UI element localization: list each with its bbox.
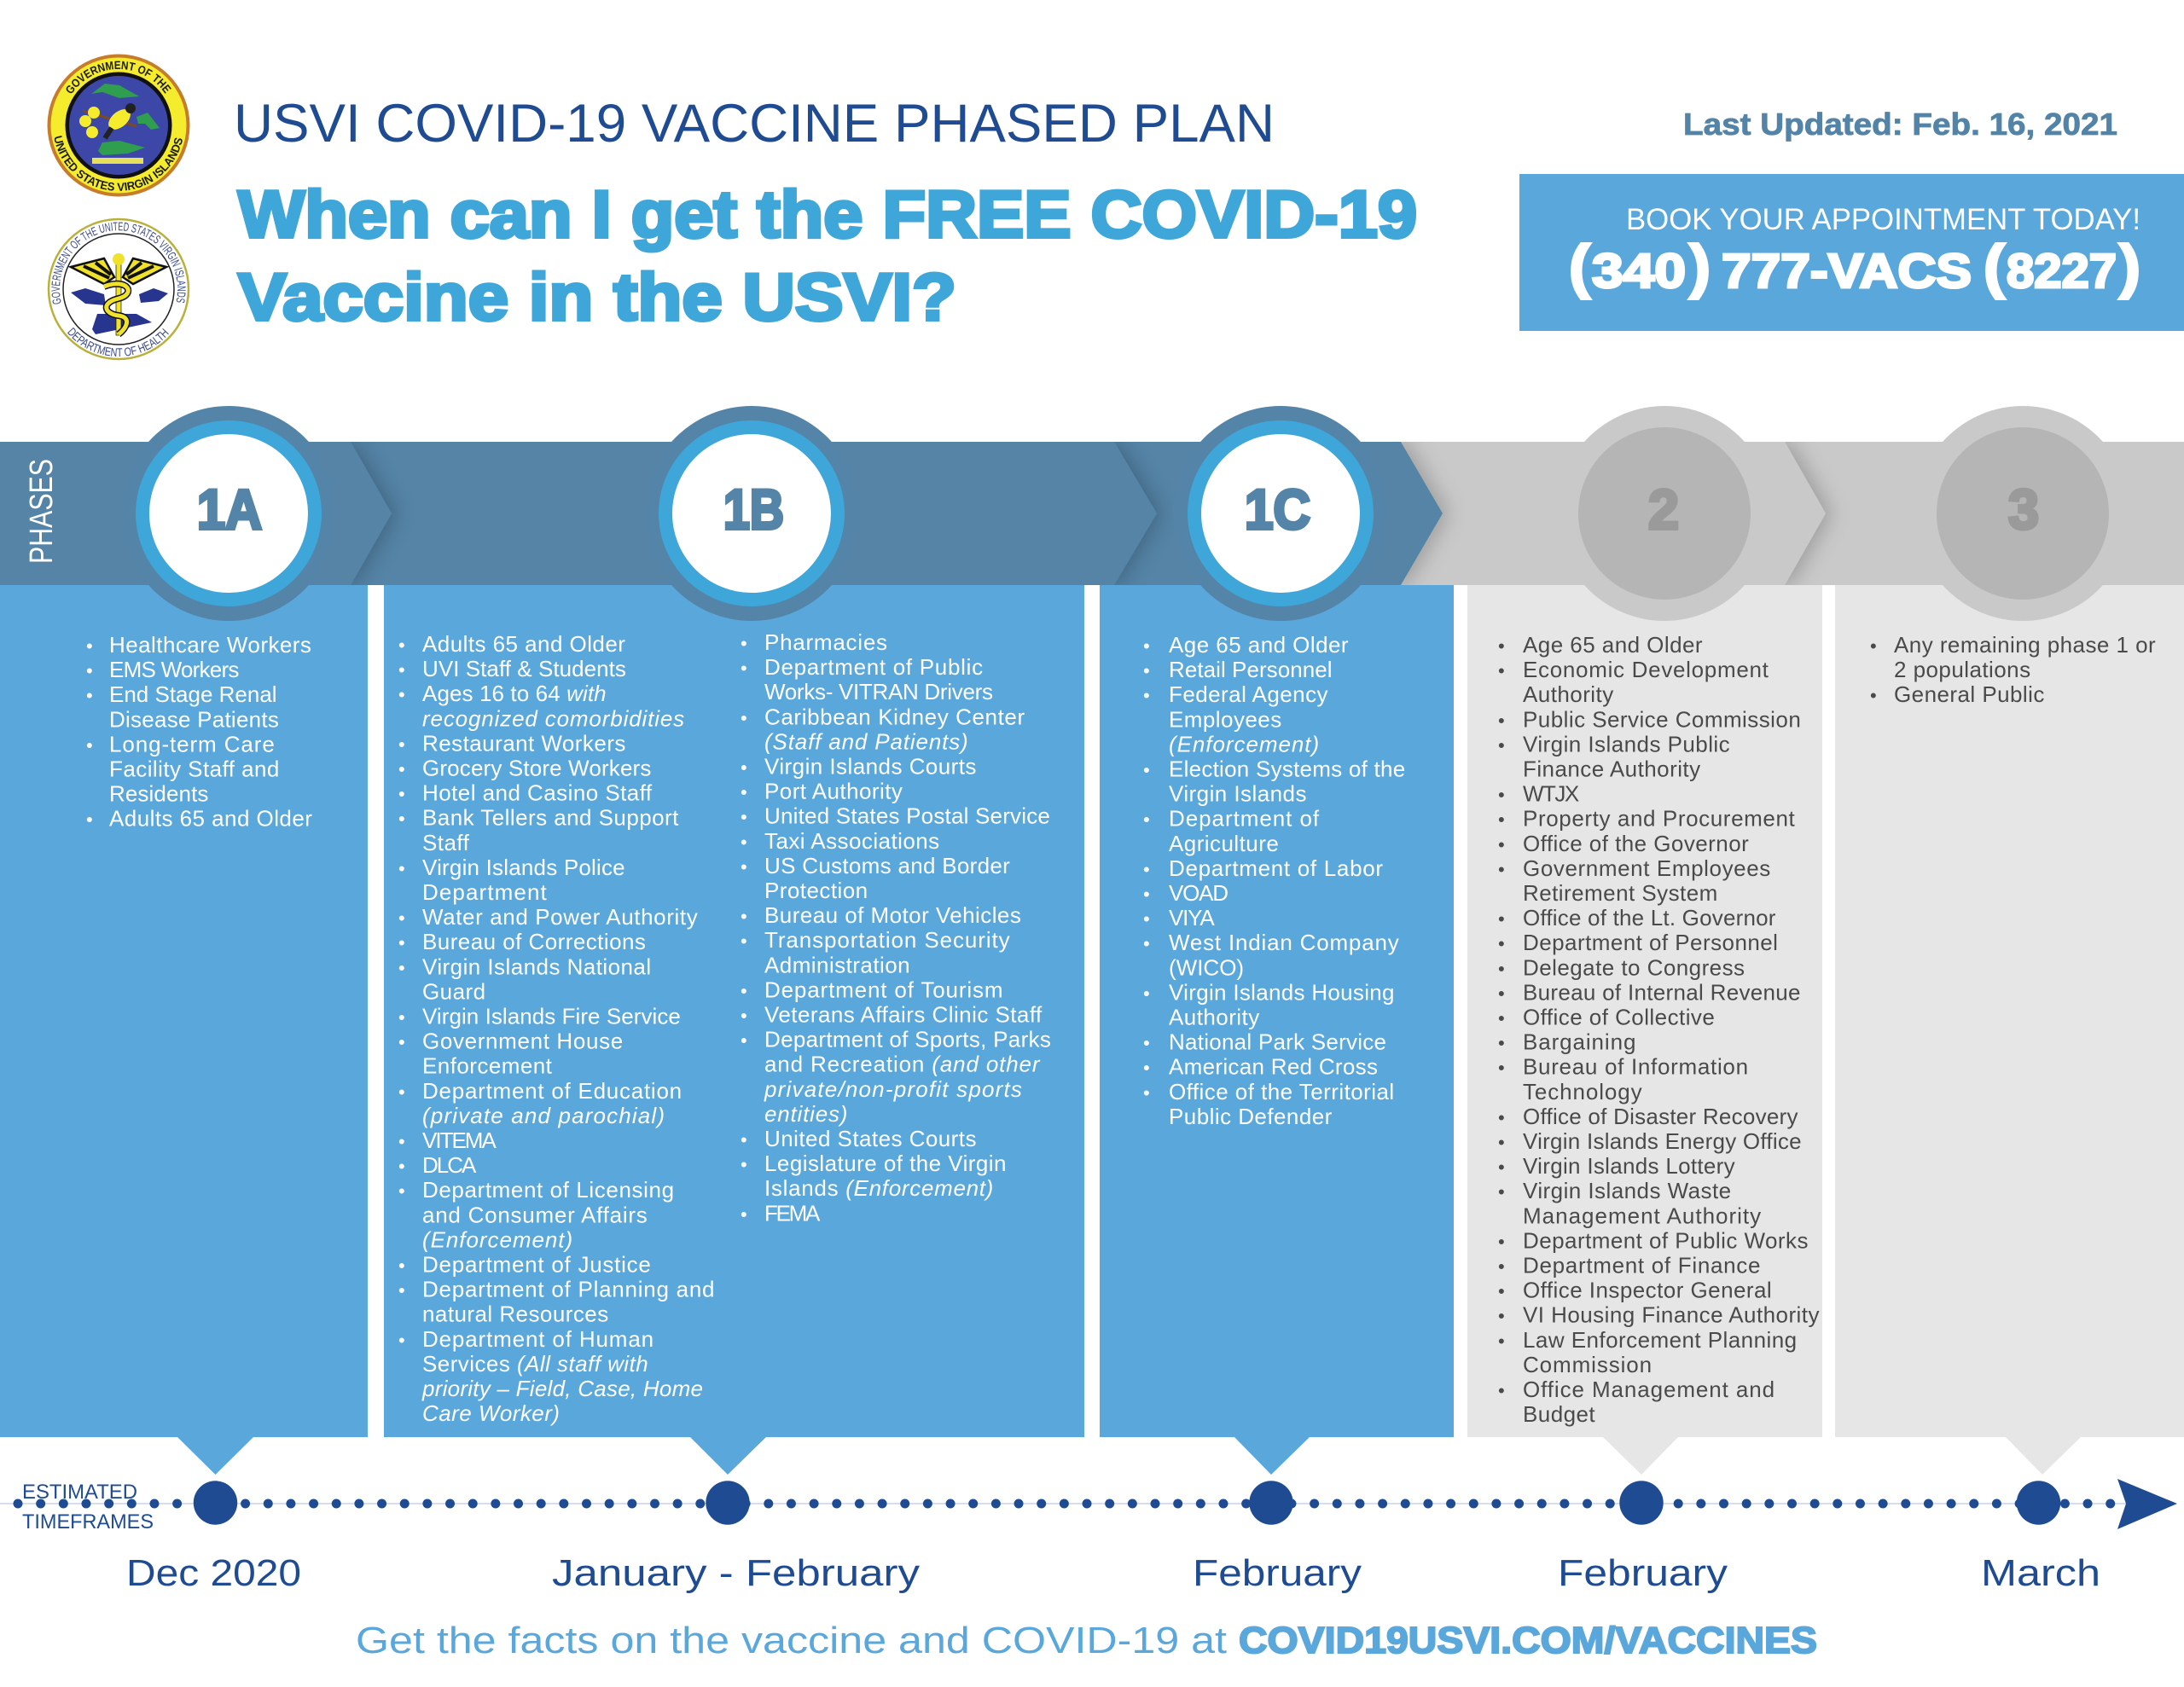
panel: phase 1B: Works- VITRAN Drivers: [764, 679, 993, 704]
panel: phase 1B: Bureau of Motor Vehicles: [764, 902, 1021, 928]
panel: phase 1B: and Consumer Affairs: [422, 1202, 648, 1227]
panel: phase 2: Government Employees: [1523, 855, 1771, 881]
panel: phase 1B: •: [741, 906, 747, 927]
panel: phase 1B: (Enforcement): [422, 1226, 573, 1252]
panel: phase 2: Virgin Islands Public: [1523, 731, 1730, 757]
panel: phase 1A: •: [86, 635, 93, 657]
panel: phase 1C: Department of: [1169, 806, 1320, 832]
badge: phase 3: [1915, 406, 2130, 621]
panel: phase 2: Office Inspector General: [1523, 1278, 1772, 1303]
panel: phase 1C: Office of the Territorial: [1169, 1079, 1395, 1104]
panel: phase 2: •: [1498, 785, 1505, 806]
seal: Department of Health: DEPARTMENT OF HEALTH: [67, 328, 169, 357]
panel: phase 1C: •: [1143, 884, 1150, 905]
panel: phase 1B: •: [398, 907, 405, 929]
panel: phase 1C: VIYA: [1169, 905, 1215, 930]
panel: phase 1B: Virgin Islands Courts: [764, 754, 977, 780]
panel: phase 2: •: [1498, 1181, 1505, 1203]
panel: phase 1C: •: [1143, 983, 1150, 1004]
panel: phase 1B: Restaurant Workers: [422, 730, 626, 756]
label: estimated timeframes: ESTIMATED: [22, 1481, 137, 1504]
panel: phase 1A: •: [86, 660, 93, 681]
panel: phase 1B: Protection: [764, 878, 868, 903]
panel: phase 1B: Water and Power Authority: [422, 904, 698, 930]
callout: book your appointment: [1519, 174, 2184, 331]
panel: phase 1A: Long-term Care: [109, 731, 276, 757]
label: estimated timeframes: [22, 1481, 154, 1533]
panel: phase 1B: •: [741, 930, 747, 952]
panel: phase 1C: Employees: [1169, 706, 1282, 732]
panel: phase 1B: Adults 65 and Older: [422, 631, 625, 657]
panel: phase 2: •: [1498, 908, 1505, 930]
panel: phase 1B: •: [741, 856, 747, 878]
panel: phase 1C: •: [1143, 635, 1150, 657]
panel: phase 1B: Department of Human: [422, 1326, 654, 1352]
panel: phase 1B: Guard: [422, 978, 486, 1004]
panel: phase 2: •: [1498, 1107, 1505, 1128]
panel: phase 3: Any remaining phase 1 or: [1894, 632, 2156, 658]
panel: phase 2: •: [1498, 710, 1505, 731]
seal: Department of Health: GOVERNMENT OF THE UNITED STATES VIRGIN ISLANDS: [51, 222, 186, 304]
panel: phase 1C: •: [1143, 859, 1150, 880]
panel: phase 1B: •: [398, 684, 405, 705]
panel: phase 2: Technology: [1523, 1079, 1643, 1104]
panel: phase 2: •: [1498, 1008, 1505, 1029]
panel: phase 1C: American Red Cross: [1169, 1054, 1378, 1080]
panel: phase 1C: West Indian Company: [1169, 930, 1400, 955]
panel: phase 2: Bargaining: [1523, 1029, 1636, 1055]
panel: phase 3: [1835, 585, 2184, 1475]
panel: phase 1C: Election Systems of the: [1169, 756, 1405, 781]
seal: Government of the US Virgin Islands: [48, 55, 189, 196]
panel: phase 2: Authority: [1523, 681, 1614, 707]
panel: phase 1A: [0, 585, 368, 1475]
callout: book your appointment: 777-VACS: [1722, 244, 1972, 299]
panel: phase 1B: Department: [422, 879, 548, 905]
panel: phase 1A: EMS Workers: [109, 657, 239, 682]
panel: phase 1B: •: [741, 658, 747, 679]
panel: phase 1B: Department of Sports, Parks: [764, 1027, 1051, 1052]
panel: phase 1B: •: [741, 807, 747, 828]
panel: phase 1B: Grocery Store Workers: [422, 756, 652, 781]
callout: book your appointment: 340: [1592, 244, 1686, 299]
panel: phase 1B: •: [398, 784, 405, 805]
panel: phase 1A: •: [86, 734, 93, 756]
panel: phase 1C: •: [1143, 809, 1150, 831]
panel: phase 1C: •: [1143, 933, 1150, 954]
panel: phase 1B: Transportation Security: [764, 927, 1011, 953]
panel: phase 1B: Care Worker): [422, 1400, 560, 1426]
panel: phase 1C: Virgin Islands Housing: [1169, 979, 1395, 1005]
panel: phase 1C: •: [1143, 908, 1150, 930]
panel: phase 1C: National Park Service: [1169, 1029, 1386, 1055]
panel: phase 1B: •: [398, 932, 405, 954]
panel: phase 1B: (private and parochial): [422, 1103, 665, 1128]
panel: phase 1B: entities): [764, 1101, 848, 1127]
text: last updated: Last Updated: Feb. 16, 2021: [1683, 107, 2117, 142]
panel: phase 1B: Taxi Associations: [764, 828, 940, 854]
panel: phase 1B: •: [398, 809, 405, 830]
panel: phase 1B: Islands (Enforcement): [764, 1175, 994, 1201]
panel: phase 1B: US Customs and Border: [764, 853, 1010, 878]
panel: phase 2: Finance Authority: [1523, 756, 1701, 781]
panel: phase 2: Office Management and: [1523, 1377, 1775, 1402]
panel: phase 2: •: [1498, 635, 1505, 657]
panel: phase 1B: •: [398, 858, 405, 879]
panel: phase 1C: •: [1143, 1058, 1150, 1079]
phases band with chevrons: [0, 442, 2184, 585]
panel: phase 3: General Public: [1894, 681, 2045, 707]
date label: phase 3: March: [1981, 1552, 2100, 1594]
panel: phase 1B: •: [741, 1006, 747, 1027]
panel: phase 1C: VOAD: [1169, 880, 1228, 906]
panel: phase 2: Public Service Commission: [1523, 706, 1801, 732]
seal: Department of Health: [48, 218, 189, 360]
panel: phase 1A: •: [86, 809, 93, 831]
panel: phase 2: Retirement System: [1523, 880, 1718, 906]
panel: phase 1B: VITEMA: [422, 1128, 497, 1153]
panel: phase 2: •: [1498, 1281, 1505, 1302]
panel: phase 1B: •: [741, 1030, 747, 1052]
panel: phase 2: Economic Development: [1523, 657, 1769, 682]
panel: phase 2: •: [1498, 859, 1505, 880]
panel: phase 1B: •: [741, 782, 747, 803]
callout: book your appointment: 8227: [2007, 244, 2117, 299]
panel: phase 1C: •: [1143, 685, 1150, 706]
panel: phase 1C: Retail Personnel: [1169, 657, 1333, 682]
panel: phase 1C: Age 65 and Older: [1169, 632, 1349, 658]
badge: phase 3: 3: [2008, 478, 2039, 541]
panel: phase 1B: [384, 585, 1084, 1475]
panel: phase 2: •: [1498, 958, 1505, 979]
panel: phase 1B: Services (All staff with: [422, 1351, 648, 1377]
panel: phase 1B: •: [398, 1131, 405, 1152]
callout: book your appointment: (: [1569, 233, 1591, 299]
badge: phase 1A: 1A: [197, 478, 262, 541]
panel: phase 1C: [1100, 585, 1454, 1475]
badge: phase 2: 2: [1648, 478, 1679, 541]
panel: phase 1B: natural Resources: [422, 1301, 609, 1327]
panel: phase 1B: •: [741, 1203, 747, 1225]
panel: phase 1B: •: [398, 1007, 405, 1029]
panel: phase 2: •: [1498, 933, 1505, 954]
panel: phase 1B: Caribbean Kidney Center: [764, 704, 1025, 729]
callout: book your appointment: ): [2119, 233, 2140, 299]
panel: phase 2: •: [1498, 1157, 1505, 1178]
panel: phase 1B: DLCA: [422, 1152, 477, 1178]
panel: phase 1B: •: [741, 707, 747, 728]
panel: phase 2: Virgin Islands Energy Office: [1523, 1128, 1802, 1154]
panel: phase 2: •: [1498, 983, 1505, 1004]
panel: phase 2: Property and Procurement: [1523, 806, 1796, 832]
panel: phase 1B: Department of Education: [422, 1078, 682, 1104]
panel: phase 2: •: [1498, 1380, 1505, 1401]
panel: phase 1A: Residents: [109, 781, 209, 807]
badge: phase 2: [1557, 406, 1772, 621]
label: phases: PHASES: [24, 459, 60, 564]
panel: phase 3: 2 populations: [1894, 657, 2031, 682]
panel: phase 2: •: [1498, 1330, 1505, 1352]
panel: phase 1B: United States Courts: [764, 1126, 977, 1151]
panel: phase 2: •: [1498, 1255, 1505, 1277]
panel: phase 1B: •: [741, 980, 747, 1001]
panel: phase 1B: •: [398, 1032, 405, 1053]
panel: phase 1B: Department of Licensing: [422, 1177, 675, 1203]
panel: phase 1B: and Recreation (and other: [764, 1052, 1040, 1077]
panel: phase 1B: Virgin Islands Fire Service: [422, 1004, 681, 1029]
panel: phase 2: •: [1498, 1306, 1505, 1327]
panel: phase 1B: •: [741, 633, 747, 654]
panel: phase 1C: (Enforcement): [1169, 731, 1320, 757]
panel: phase 1C: •: [1143, 759, 1150, 781]
panel: phase 2: Budget: [1523, 1401, 1595, 1427]
panel: phase 2: Age 65 and Older: [1523, 632, 1703, 658]
panel: phase 2: Department of Personnel: [1523, 930, 1778, 955]
panel: phase 1B: •: [398, 1081, 405, 1103]
panel: phase 1B: private/non-profit sports: [764, 1076, 1023, 1102]
callout: book your appointment: BOOK YOUR APPOINTMENT TODAY!: [1626, 203, 2140, 236]
panel: phase 2: •: [1498, 734, 1505, 756]
seal: Government of the US Virgin Islands: UNITED STATES VIRGIN ISLANDS: [55, 136, 183, 191]
panel: phase 2: •: [1498, 1132, 1505, 1153]
panel: phase 1B: priority – Field, Case, Home: [421, 1376, 703, 1401]
panel: phase 2: Bureau of Internal Revenue: [1523, 979, 1801, 1005]
footer: get the facts: COVID19USVI.COM/VACCINES: [1239, 1620, 1817, 1661]
panel: phase 1B: Virgin Islands Police: [422, 855, 625, 880]
panel: phase 1B: UVI Staff & Students: [422, 656, 626, 681]
panel: phase 2: Office of the Governor: [1523, 831, 1749, 856]
badge: phase 1B: 1B: [723, 478, 784, 541]
panel: phase 2: •: [1498, 809, 1505, 831]
panel: phase 2: Office of Collective: [1523, 1005, 1715, 1030]
seal: Government of the US Virgin Islands: GOVERNMENT OF THE: [67, 61, 171, 94]
panel: phase 1B: Department of Planning and: [422, 1277, 715, 1302]
badge: phase 1B: [644, 406, 859, 621]
panel: phase 1B: Legislature of the Virgin: [764, 1151, 1007, 1176]
panel: phase 1B: •: [398, 1280, 405, 1301]
panel: phase 1C: •: [1143, 1033, 1150, 1054]
panel: phase 1B: •: [398, 759, 405, 780]
date label: phase 2: February: [1558, 1552, 1728, 1594]
panel: phase 1A: Adults 65 and Older: [109, 806, 312, 832]
panel: phase 2: Bureau of Information: [1523, 1054, 1749, 1080]
panel: phase 3: •: [1870, 635, 1877, 657]
panel: phase 1A: Healthcare Workers: [109, 632, 311, 658]
panel: phase 1A: Disease Patients: [109, 706, 279, 732]
panel: phase 1A: Facility Staff and: [109, 756, 280, 781]
panel: phase 1B: Hotel and Casino Staff: [422, 780, 653, 806]
panel: phase 2: •: [1498, 1033, 1505, 1054]
panel: phase 1B: •: [398, 957, 405, 978]
heading: main question: When can I get the FREE COVID-19: [238, 177, 1417, 252]
panel: phase 1A: End Stage Renal: [109, 681, 277, 707]
panel: phase 1B: •: [741, 1129, 747, 1151]
panel: phase 2: Department of Public Works: [1523, 1227, 1809, 1253]
panel: phase 2: WTJX: [1523, 781, 1579, 807]
callout: book your appointment: (: [1984, 233, 2006, 299]
badge: phase 1C: 1C: [1245, 478, 1310, 541]
callout: book your appointment: ): [1689, 233, 1711, 299]
timeline with dots and arrow: [0, 1479, 2177, 1529]
panel: phase 1C: Agriculture: [1169, 831, 1279, 856]
panel: phase 1B: United States Postal Service: [764, 803, 1050, 829]
panel: phase 1B: Government House: [422, 1029, 624, 1054]
panel: phase 1B: Department of Justice: [422, 1251, 652, 1277]
footer: get the facts: Get the facts on the vaccine and COVID-19 at: [356, 1620, 1227, 1661]
panel: phase 1C: (WICO): [1169, 954, 1244, 980]
panel: phase 1B: (Staff and Patients): [764, 728, 969, 754]
date label: phase 1C: February: [1193, 1552, 1362, 1594]
panel: phase 1B: •: [741, 757, 747, 778]
panel: phase 1B: Port Authority: [764, 779, 903, 804]
panel: phase 1B: Veterans Affairs Clinic Staff: [764, 1002, 1043, 1028]
panel: phase 2: •: [1498, 834, 1505, 855]
panel: phase 1B: •: [398, 1255, 405, 1276]
panel: phase 1B: Bureau of Corrections: [422, 929, 646, 954]
panel: phase 3: •: [1870, 685, 1877, 706]
panel: phase 1B: •: [398, 659, 405, 681]
panel: phase 2: VI Housing Finance Authority: [1523, 1302, 1820, 1328]
panel: phase 1C: Authority: [1169, 1005, 1260, 1030]
panel: phase 1B: Department of Tourism: [764, 977, 1003, 1002]
panel: phase 2: Virgin Islands Waste: [1523, 1178, 1732, 1203]
panel: phase 1C: Virgin Islands: [1169, 781, 1307, 807]
panel: phase 1C: •: [1143, 660, 1150, 681]
panel: phase 1B: Bank Tellers and Support: [422, 805, 679, 831]
panel: phase 1C: Public Defender: [1169, 1104, 1333, 1129]
heading: plan title: USVI COVID-19 VACCINE PHASED PLAN: [234, 94, 1275, 154]
panel: phase 2: Office of the Lt. Governor: [1523, 905, 1776, 930]
date label: phase 1A: Dec 2020: [126, 1552, 301, 1594]
panel: phase 1B: Department of Public: [764, 654, 984, 680]
panel: phase 2: Commission: [1523, 1352, 1653, 1377]
panel: phase 1B: •: [741, 1154, 747, 1175]
footer: get the facts: [356, 1620, 1817, 1661]
panel: phase 1B: Enforcement: [422, 1053, 553, 1079]
panel: phase 1B: recognized comorbidities: [422, 705, 685, 731]
panel: phase 1A: •: [86, 685, 93, 706]
badge: phase 1C: [1173, 406, 1388, 621]
panel: phase 1C: Department of Labor: [1169, 855, 1384, 881]
panel: phase 1C: •: [1143, 1082, 1150, 1104]
panel: phase 2: Department of Finance: [1523, 1252, 1761, 1278]
panel: phase 2: Virgin Islands Lottery: [1523, 1153, 1735, 1179]
panel: phase 1C: Federal Agency: [1169, 681, 1328, 707]
panel: phase 1B: •: [398, 1330, 405, 1351]
panel: phase 1B: Staff: [422, 830, 470, 855]
panel: phase 2: •: [1498, 660, 1505, 681]
badge: phase 1A: [121, 406, 336, 621]
panel: phase 1B: Virgin Islands National: [422, 954, 652, 979]
panel: phase 1B: •: [741, 832, 747, 853]
heading: main question: [238, 177, 1417, 334]
panel: phase 2: •: [1498, 1058, 1505, 1079]
panel: phase 1B: FEMA: [764, 1200, 821, 1226]
panel: phase 2: Office of Disaster Recovery: [1523, 1104, 1798, 1129]
panel: phase 1B: Pharmacies: [764, 629, 888, 655]
panel: phase 1B: •: [398, 733, 405, 755]
panel: phase 2: Delegate to Congress: [1523, 954, 1745, 980]
panel: phase 2: •: [1498, 1231, 1505, 1252]
label: estimated timeframes: TIMEFRAMES: [22, 1510, 154, 1533]
panel: phase 2: Management Authority: [1523, 1203, 1762, 1228]
heading: main question: Vaccine in the USVI?: [238, 259, 956, 334]
panel: phase 1B: •: [398, 1156, 405, 1177]
panel: phase 1B: Administration: [764, 952, 910, 977]
panel: phase 1B: •: [398, 635, 405, 656]
date label: phase 1B: January - February: [552, 1552, 920, 1594]
panel: phase 2: Law Enforcement Planning: [1523, 1327, 1798, 1353]
panel: phase 2: [1467, 585, 1827, 1475]
panel: phase 1B: •: [398, 1180, 405, 1202]
panel: phase 1B: Ages 16 to 64 with: [422, 681, 607, 706]
